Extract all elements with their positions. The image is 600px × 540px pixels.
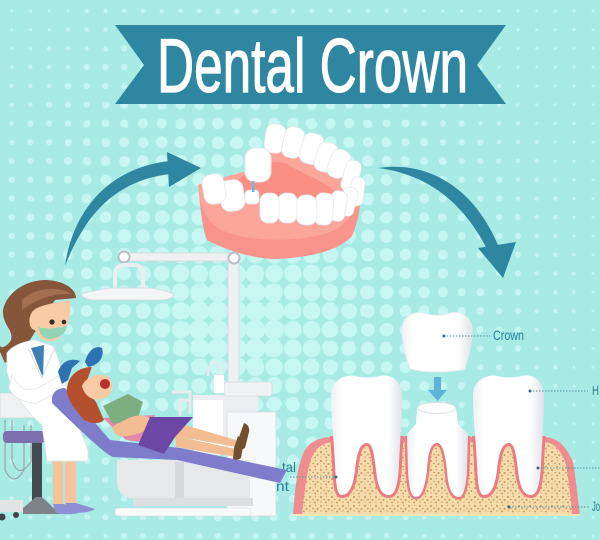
prepared tooth stump [407,402,468,497]
shoes [233,423,249,460]
water tap [208,362,222,376]
mouth [100,379,110,389]
skirt [138,417,193,454]
legs [53,460,76,506]
callout: crown: Crown [493,327,524,343]
callout: healthy tooth [528,382,599,398]
stool seat [3,431,45,443]
dentist stool and instruments [0,393,60,520]
face [82,375,112,400]
gum [293,437,580,515]
green top [103,394,143,424]
crown cap [402,312,472,372]
dentist [0,280,103,514]
crown guide arrow [252,181,254,192]
glove right [85,347,103,367]
tooth anatomy diagram [293,312,580,516]
hair [0,280,76,363]
teeth row [201,123,366,226]
scrubs [31,345,44,378]
mask [38,326,67,339]
dental lamp and arm [81,252,240,385]
healthy tooth left [331,375,402,495]
glove left [58,360,80,384]
lamp pillar [228,260,239,385]
gum base [198,140,361,259]
face [29,300,70,341]
callout: root [536,466,600,470]
dental chair [52,388,287,483]
title banner [115,24,506,109]
tray [224,382,272,396]
lamp arm [120,253,234,261]
labels: left clipped: nt [276,478,289,494]
pink shirt [103,415,155,443]
tool holder [172,392,190,416]
instrument tray [0,393,35,418]
coat lapel [28,347,55,378]
palate [235,162,334,202]
healthy tooth right [473,375,544,495]
patient [67,367,249,460]
labels: left clipped [276,459,296,494]
stool post [32,443,42,503]
floor plate [115,508,251,516]
unit base [0,500,23,512]
callout: jawbone [508,498,600,514]
hair [67,367,104,423]
dental unit cabinet [115,362,276,516]
left arm [9,375,64,404]
dentures model [198,123,366,259]
callout: crown [442,327,524,343]
cabinet side [227,412,276,516]
arrow: right curved [378,167,516,278]
chair base [117,460,250,498]
joint right [228,252,240,264]
hoses [5,420,31,479]
lamp dish [81,288,174,300]
bone base line [293,514,580,516]
eyes [49,319,66,325]
arrow: crown down [428,377,447,401]
gum upper tone [198,140,361,240]
floating crown [245,148,271,182]
cabinet body [193,395,258,455]
arrow: left curved [65,152,201,266]
skin arm and legs [112,416,236,457]
joint left [118,252,130,262]
lab coat [7,340,88,461]
callout: left root [290,476,338,478]
stool base [23,497,60,514]
jaw bone [302,442,572,515]
lamp handle [115,265,143,295]
labels: left clipped: tal [282,459,296,475]
shoes [53,503,95,514]
hair highlight [22,289,72,310]
